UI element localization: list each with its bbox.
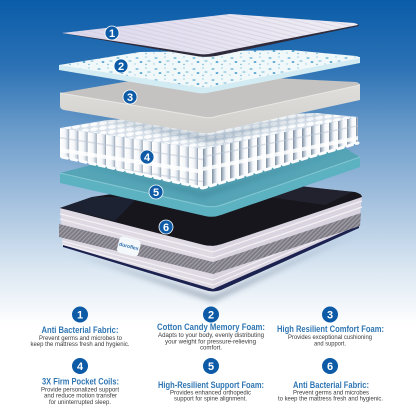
mesh band bbox=[59, 213, 361, 274]
left side bbox=[60, 208, 213, 289]
number badges on layers: 3 bbox=[127, 92, 133, 104]
feature 1: Prevent germs and microbes to bbox=[39, 335, 122, 342]
feature 5: support for spine alignment. bbox=[174, 396, 247, 403]
feature 5: Provides enhanced orthopedic bbox=[170, 390, 252, 396]
number badges on layers bbox=[105, 26, 173, 234]
feature 2: Adapts to your body, evenly distributing bbox=[158, 332, 264, 339]
feature 2 bbox=[157, 306, 265, 352]
memory foam top bbox=[59, 50, 360, 88]
fabric top bbox=[62, 14, 358, 54]
feature 1 bbox=[30, 306, 130, 348]
foam side bbox=[60, 84, 360, 133]
layer 4: pocket coils bbox=[60, 113, 358, 198]
feature 2: Cotton Candy Memory Foam: bbox=[157, 322, 265, 332]
number badges on layers: 4 bbox=[144, 152, 151, 164]
feature 5: High-Resilient Support Foam: bbox=[158, 380, 264, 390]
feature 2: your weight for pressure-relieving bbox=[165, 338, 256, 345]
layer 6: mattress base bbox=[59, 186, 362, 302]
feature 3: Provides exceptional cushioning bbox=[288, 334, 372, 341]
brand label: duroflex bbox=[118, 242, 139, 252]
fabric stripes bbox=[62, 14, 358, 54]
navy bottom edge bbox=[63, 224, 359, 292]
side piping bbox=[60, 201, 362, 285]
number badges on layers: 6 bbox=[163, 222, 169, 234]
feature 1: keep the mattress fresh and hygienic. bbox=[30, 341, 130, 348]
brand label bbox=[116, 236, 142, 257]
feature 3 bbox=[277, 306, 384, 348]
feature 6: Anti Bacterial Fabric: bbox=[293, 380, 369, 390]
right side bbox=[213, 195, 362, 289]
mattress shadow bbox=[70, 234, 355, 302]
layer 3: grey comfort foam bbox=[60, 78, 360, 142]
number badges on layers: 2 bbox=[118, 61, 124, 73]
foam shadow bbox=[70, 106, 350, 142]
foam top bbox=[60, 78, 360, 118]
feature 1: 1 bbox=[77, 310, 83, 322]
layer 5: teal support foam bbox=[60, 145, 360, 217]
feature 4: for uninterrupted sleep. bbox=[49, 399, 111, 406]
feature 4: and reduce motion transfer bbox=[44, 392, 118, 400]
number badges on layers: 1 bbox=[109, 28, 115, 40]
feature 2: comfort. bbox=[200, 345, 222, 352]
feature 6: Prevent germs and microbes bbox=[293, 390, 370, 396]
scalloped coil bottom edge bbox=[62, 143, 358, 188]
number badges on layers: 5 bbox=[153, 187, 159, 199]
coil left face bbox=[60, 128, 203, 188]
coil right face bbox=[203, 117, 358, 188]
feature 4: 4 bbox=[77, 361, 84, 373]
coil top face bbox=[60, 113, 358, 149]
feature 4 bbox=[41, 358, 119, 406]
feature 5: 5 bbox=[208, 361, 214, 373]
fabric edge bbox=[61, 24, 359, 57]
feature 6: 6 bbox=[327, 361, 333, 373]
feature 1: Anti Bacterial Fabric: bbox=[42, 325, 118, 335]
memory foam side bbox=[59, 57, 360, 93]
feature 3: High Resilient Comfort Foam: bbox=[277, 324, 384, 334]
feature 4: 3X Firm Pocket Coils: bbox=[42, 376, 119, 386]
feature 2: 2 bbox=[208, 310, 214, 322]
feature 6 bbox=[278, 358, 383, 403]
coil shadow bbox=[62, 146, 356, 198]
layer 1: anti bacterial fabric bbox=[61, 14, 359, 57]
feature 6: to keep the mattress fresh and hygienic. bbox=[278, 396, 383, 403]
feature 3: and support. bbox=[314, 340, 346, 348]
layer 2: cotton candy memory foam bbox=[59, 50, 360, 93]
feature 3: 3 bbox=[327, 310, 333, 322]
black top bbox=[60, 187, 362, 246]
feature 5 bbox=[158, 358, 264, 403]
feature 4: Provide personalized support bbox=[41, 386, 119, 393]
